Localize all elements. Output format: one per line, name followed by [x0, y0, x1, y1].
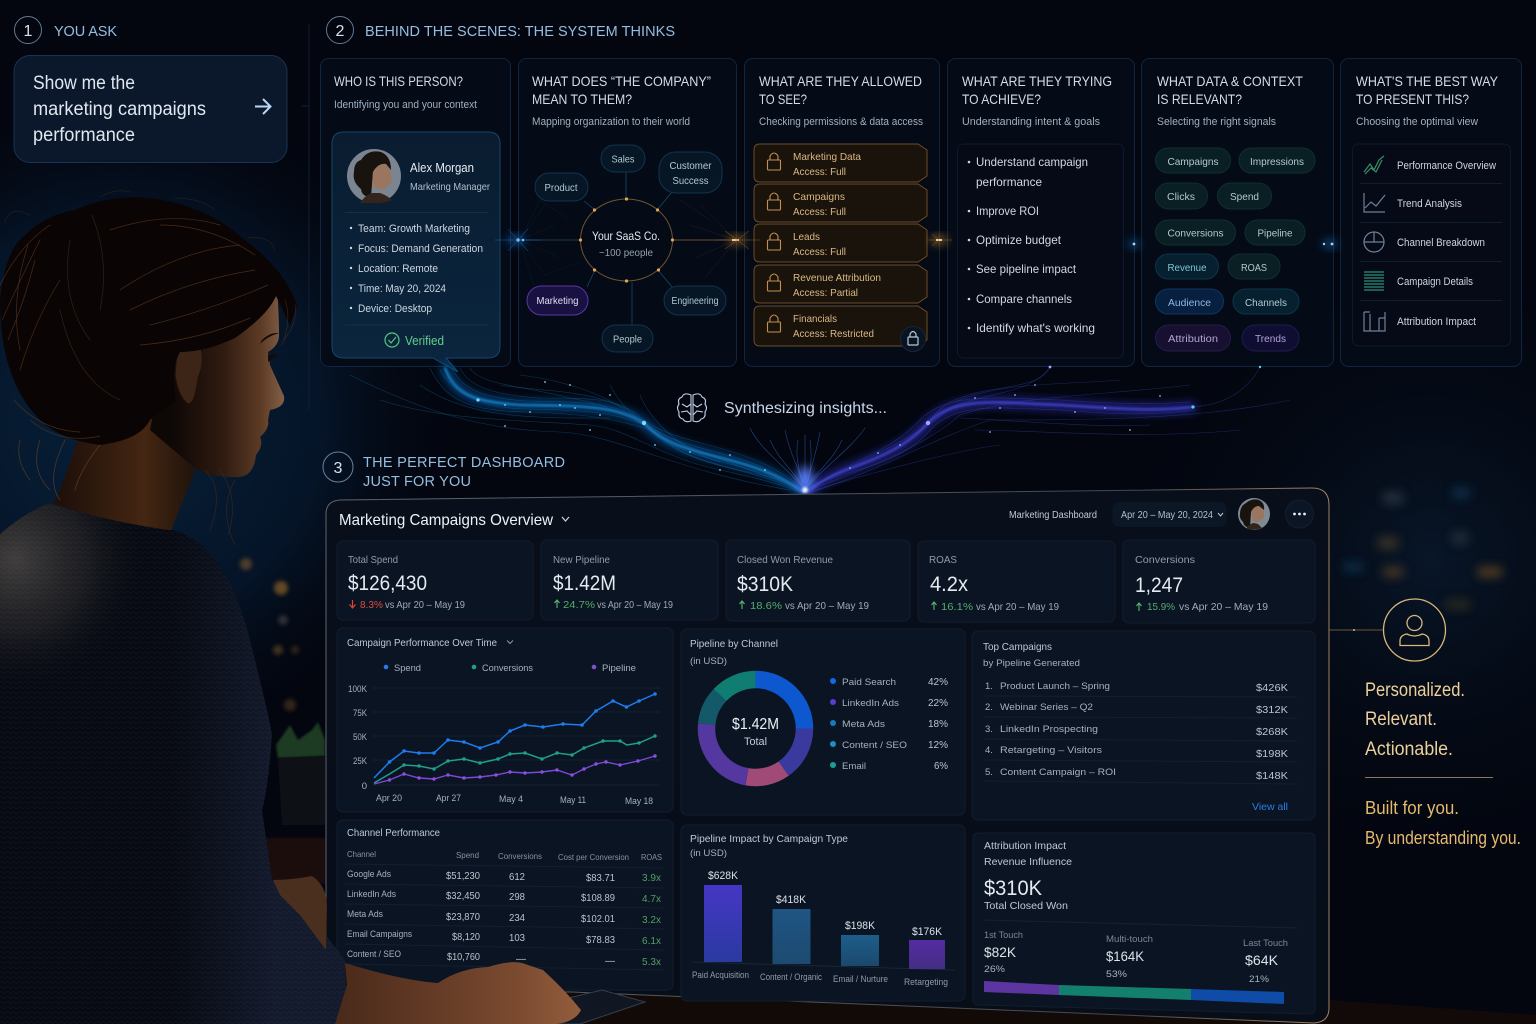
step 3 heading: THE PERFECT DASHBOARD	[363, 455, 565, 471]
KPI: conversions: 15.9%	[1147, 601, 1175, 613]
channel performance table: —	[516, 954, 526, 965]
donut panel: (in USD)	[690, 656, 727, 667]
channel performance table: Channel	[347, 849, 376, 859]
channel performance table: Meta Ads	[347, 909, 383, 920]
step 3 heading	[323, 452, 565, 490]
view options	[1352, 144, 1510, 346]
KPI: ROAS: 4.2x	[930, 573, 968, 596]
icon: arrow	[255, 99, 270, 114]
neck	[50, 400, 195, 535]
donut legend: LinkedIn Ads	[842, 698, 899, 709]
panel: best way to present: Choosing the optimal view	[1356, 116, 1478, 128]
step 1 heading: you ask: YOU ASK	[54, 24, 117, 40]
panel: what does the company mean	[518, 58, 737, 366]
avatar	[1238, 498, 1270, 530]
donut legend: 18%	[928, 719, 948, 730]
channel performance table: $78.83	[586, 935, 615, 946]
panel: what does the company mean: Mapping organization to their world	[532, 116, 690, 128]
channel performance table: 4.7x	[642, 893, 662, 905]
signal pills: Spend	[1230, 191, 1259, 203]
channel performance table: 298	[509, 892, 525, 903]
chart axes: 0	[362, 781, 367, 792]
channel performance table: $83.71	[586, 873, 615, 884]
top campaigns panel: 5.	[985, 767, 993, 778]
right hand	[335, 962, 581, 1024]
channel performance table: Channel Performance	[347, 827, 440, 839]
view options: Performance Overview	[1397, 160, 1496, 172]
attribution panel: $310K	[984, 877, 1042, 900]
channel performance table: $23,870	[446, 912, 480, 923]
channel performance table: —	[605, 956, 615, 967]
KPI: ROAS: vs Apr 20 – May 19	[976, 601, 1059, 613]
profile details: Team: Growth Marketing	[358, 223, 470, 235]
signal pills: Conversions	[1168, 228, 1224, 240]
donut legend: 42%	[928, 677, 948, 688]
right stream	[806, 366, 1290, 492]
org nodes: Marketing	[536, 295, 579, 307]
KPI: conversions: Conversions	[1135, 554, 1195, 566]
icon: restricted lock	[900, 326, 926, 352]
goals list: See pipeline impact	[976, 262, 1077, 276]
bar chart panel: $198K	[845, 920, 876, 932]
profile details: Location: Remote	[358, 263, 438, 275]
bar chart panel: $628K	[708, 870, 739, 882]
channel performance table: Email Campaigns	[347, 929, 412, 940]
goals list: Optimize budget	[976, 233, 1062, 247]
panel: what are they trying to achieve: WHAT ARE THEY TRYING	[962, 73, 1112, 89]
channel performance table: 103	[509, 933, 525, 944]
step 2 heading: 2	[336, 23, 345, 40]
attribution panel	[973, 833, 1315, 1014]
permission rows	[754, 144, 927, 352]
channel performance table: LinkedIn Ads	[347, 889, 396, 900]
chart legend	[384, 663, 636, 674]
signal pills: Pipeline	[1258, 228, 1293, 240]
signal pills: Trends	[1255, 333, 1286, 345]
dashboard header: Apr 20 – May 20, 2024	[1121, 510, 1213, 521]
goals list: Improve ROI	[976, 204, 1039, 218]
pipeline line	[374, 754, 657, 784]
KPI: total spend: 8.3%	[360, 599, 383, 611]
profile details: Time: May 20, 2024	[358, 283, 446, 295]
KPI: closed won revenue: vs Apr 20 – May 19	[785, 600, 869, 612]
channel performance table: Cost per Conversion	[558, 852, 629, 862]
KPI: ROAS: ROAS	[929, 554, 957, 566]
donut legend: Meta Ads	[842, 719, 885, 730]
KPI: total spend: Total Spend	[348, 554, 398, 566]
query card: marketing campaigns	[33, 99, 206, 120]
chart axes: Apr 20	[376, 793, 402, 804]
line chart panel	[337, 628, 673, 812]
bar chart panel: $176K	[912, 926, 943, 938]
attribution panel: 26%	[984, 964, 1006, 975]
KPI: new pipeline	[541, 540, 718, 620]
attribution panel: $64K	[1245, 952, 1279, 968]
donut panel: Total	[744, 736, 767, 748]
step 2 heading	[326, 16, 675, 44]
chart legend: Spend	[394, 663, 421, 674]
panel: who is this person: WHO IS THIS PERSON?	[334, 73, 463, 89]
goals list: Identify what's working	[976, 321, 1095, 335]
divider between steps	[301, 24, 309, 410]
donut legend: 12%	[928, 740, 948, 751]
KPI: new pipeline: vs Apr 20 – May 19	[597, 599, 673, 611]
top campaigns panel: Content Campaign – ROI	[1000, 767, 1116, 778]
top campaigns panel: $312K	[1256, 705, 1288, 716]
top campaigns panel: $198K	[1256, 749, 1288, 760]
permission rows: Leads	[793, 231, 820, 243]
donut legend: 6%	[934, 761, 948, 772]
permission rows: Access: Full	[793, 166, 846, 178]
channel performance table: ROAS	[641, 852, 662, 862]
donut panel: $1.42M	[732, 716, 779, 733]
attribution panel: 1st Touch	[984, 930, 1023, 941]
top campaigns panel	[972, 631, 1315, 820]
panel: who is this person	[320, 58, 510, 372]
panel: what data and context: WHAT DATA & CONTEXT	[1157, 73, 1303, 89]
channel performance table: $8,120	[452, 932, 480, 943]
signal pills: Channels	[1245, 297, 1287, 309]
profile details: Device: Desktop	[358, 303, 432, 315]
channel performance table: Conversions	[498, 851, 542, 861]
spend line	[374, 692, 657, 778]
channel performance table: $102.01	[581, 914, 615, 925]
avatar	[347, 149, 401, 203]
donut chart	[706, 680, 804, 778]
verified badge: Verified	[405, 334, 444, 348]
channel performance table: 612	[509, 872, 525, 883]
KPI: total spend: vs Apr 20 – May 19	[385, 599, 465, 611]
chart axes: May 4	[499, 794, 523, 805]
channel performance table: 3.9x	[642, 872, 662, 884]
KPI: total spend	[337, 541, 533, 620]
plant and desk haze	[262, 722, 326, 884]
channel performance table: 5.3x	[642, 956, 662, 968]
attribution panel: Total Closed Won	[984, 900, 1068, 912]
chart axes: 25K	[353, 756, 368, 767]
top campaigns panel: $268K	[1256, 727, 1288, 738]
donut panel: Pipeline by Channel	[690, 638, 778, 650]
top campaigns panel: LinkedIn Prospecting	[1000, 724, 1098, 735]
KPI: total spend: $126,430	[348, 572, 427, 595]
view options: Channel Breakdown	[1397, 237, 1485, 249]
top campaigns panel: Webinar Series – Q2	[1000, 702, 1093, 713]
bar chart panel: Email / Nurture	[833, 974, 888, 984]
panel: what are they allowed to see: Checking permissions & data access	[759, 116, 923, 128]
top campaigns panel: 4.	[985, 745, 993, 756]
panel: what data and context	[1142, 58, 1334, 366]
dashboard header: Marketing Campaigns Overview	[339, 512, 553, 529]
attribution panel: Last Touch	[1243, 938, 1288, 949]
step 1 heading: you ask	[14, 16, 117, 44]
more options button	[1286, 500, 1314, 528]
donut legend: 22%	[928, 698, 948, 709]
bar chart panel: (in USD)	[690, 848, 727, 859]
line chart panel: Campaign Performance Over Time	[347, 637, 497, 649]
org nodes: Engineering	[672, 295, 719, 307]
hair strands	[0, 191, 296, 545]
KPI: closed won revenue: Closed Won Revenue	[737, 554, 833, 566]
donut panel	[681, 629, 965, 815]
bars	[704, 885, 945, 969]
top campaigns panel: Top Campaigns	[983, 641, 1052, 653]
icon: brain	[678, 394, 706, 422]
personalised callout: Personalized.	[1365, 680, 1465, 701]
step 3 heading: JUST FOR YOU	[363, 474, 471, 490]
panel: what does the company mean: MEAN TO THEM?	[532, 91, 632, 107]
step 2 heading: BEHIND THE SCENES: THE SYSTEM THINKS	[365, 24, 675, 40]
org nodes: Product	[544, 182, 578, 194]
attribution panel: Multi-touch	[1106, 934, 1153, 945]
hair	[0, 197, 297, 445]
permission rows: Revenue Attribution	[793, 272, 881, 284]
signal pills: Impressions	[1250, 156, 1304, 168]
lock icons	[768, 153, 780, 332]
goals list: Compare channels	[976, 292, 1072, 306]
panel: best way to present: TO PRESENT THIS?	[1356, 91, 1469, 107]
channel performance table: $10,760	[447, 952, 480, 963]
signal pills: Revenue	[1168, 262, 1207, 274]
step 1 heading: you ask: 1	[24, 23, 33, 40]
donut legend	[830, 677, 948, 772]
KPI: closed won revenue: 18.6%	[750, 600, 782, 612]
org nodes: Customer	[670, 160, 712, 172]
face	[150, 288, 284, 477]
donut legend: Email	[842, 761, 866, 772]
view options: Attribution Impact	[1397, 316, 1476, 328]
view icons	[1364, 156, 1385, 331]
panel: what data and context: IS RELEVANT?	[1157, 91, 1242, 107]
profile details	[350, 223, 483, 315]
keyboard	[540, 990, 645, 1024]
data streams converging on dashboard	[350, 366, 1290, 493]
org nodes: People	[613, 334, 642, 346]
org nodes: Success	[672, 175, 708, 187]
personalised callout	[1329, 599, 1521, 848]
attribution panel: $164K	[1106, 948, 1145, 964]
channel performance table: $108.89	[581, 893, 615, 904]
top campaigns panel: Retargeting – Visitors	[1000, 745, 1102, 756]
desk	[280, 992, 1320, 1024]
view options: Campaign Details	[1397, 276, 1473, 288]
bar chart panel	[681, 825, 965, 1001]
permission rows: Access: Full	[793, 206, 846, 218]
left stream	[350, 368, 806, 492]
bar chart panel: Pipeline Impact by Campaign Type	[690, 833, 848, 845]
goals list: Understand campaign	[976, 155, 1088, 169]
personalised callout: Actionable.	[1365, 739, 1453, 760]
permission rows: Access: Full	[793, 246, 846, 258]
top campaigns panel: 1.	[985, 681, 993, 692]
signal pills: ROAS	[1241, 262, 1267, 274]
bar chart panel: Paid Acquisition	[692, 970, 749, 980]
dashboard header: Marketing Dashboard	[1009, 510, 1097, 521]
chart legend: Conversions	[482, 663, 533, 674]
org map: ~100 people	[599, 247, 653, 259]
dashboard header	[339, 498, 1314, 530]
ear	[175, 339, 202, 404]
synthesizing insights label	[678, 394, 887, 422]
panel: what are they allowed to see: WHAT ARE THEY ALLOWED	[759, 73, 922, 89]
signal pills: Audience	[1168, 297, 1211, 309]
permission rows: Campaigns	[793, 191, 845, 203]
KPI: new pipeline: 24.7%	[563, 599, 595, 611]
KPI: closed won revenue	[726, 540, 910, 621]
signal pills: Campaigns	[1168, 156, 1218, 168]
top campaigns panel: $148K	[1256, 771, 1288, 782]
chart axes: 100K	[348, 684, 368, 695]
sweater	[0, 503, 347, 1024]
signal pills	[1156, 148, 1315, 351]
signal pills: Attribution	[1168, 333, 1218, 345]
permission rows: Marketing Data	[793, 151, 861, 163]
KPI: conversions	[1123, 540, 1315, 623]
channel performance table: 3.2x	[642, 914, 662, 926]
channel performance table: $51,230	[446, 871, 480, 882]
channel performance table: 6.1x	[642, 935, 662, 947]
goals list	[958, 144, 1124, 358]
channel performance table: Google Ads	[347, 869, 391, 880]
profile card: Alex Morgan	[410, 161, 474, 175]
panel: what are they trying to achieve	[948, 58, 1134, 366]
attribution panel: 53%	[1106, 969, 1128, 980]
channel performance table: Spend	[456, 850, 479, 860]
org nodes: Sales	[612, 154, 634, 166]
KPI: ROAS: 16.1%	[941, 601, 973, 613]
bar chart panel: Retargeting	[904, 977, 948, 987]
KPI: conversions: vs Apr 20 – May 19	[1179, 601, 1268, 613]
attribution panel: 21%	[1249, 974, 1270, 985]
query card	[14, 56, 287, 162]
top campaigns panel: $426K	[1256, 683, 1288, 694]
panel: what are they allowed to see	[744, 58, 940, 366]
panel: who is this person: Identifying you and your context	[334, 99, 477, 111]
KPI: ROAS	[918, 541, 1115, 622]
chart axes: 75K	[353, 708, 368, 719]
profile card	[332, 132, 500, 372]
centre fan	[750, 428, 865, 490]
bar chart panel: Content / Organic	[760, 972, 822, 982]
personalised callout: Relevant.	[1365, 709, 1437, 730]
signal pills: Clicks	[1167, 191, 1195, 203]
synthesizing insights label: Synthesizing insights...	[724, 400, 887, 417]
KPI: closed won revenue: $310K	[737, 573, 793, 596]
panel: what are they allowed to see: TO SEE?	[759, 91, 807, 107]
chart axes: 50K	[353, 732, 368, 743]
chart axes: May 18	[625, 796, 653, 807]
top campaigns panel: 3.	[985, 724, 993, 735]
profile card: Marketing Manager	[410, 181, 490, 193]
permission rows: Access: Partial	[793, 287, 858, 299]
personalised callout: Built for you.	[1365, 798, 1459, 818]
connector glows between panels	[495, 229, 1338, 251]
woman at desk	[0, 191, 645, 1024]
panel: best way to present: WHAT'S THE BEST WAY	[1356, 73, 1499, 89]
dashboard	[326, 488, 1329, 1023]
attribution bar	[984, 981, 1284, 1004]
top campaigns panel: by Pipeline Generated	[983, 658, 1080, 669]
step 3 heading: 3	[334, 460, 343, 477]
org map	[518, 145, 737, 352]
chart legend: Pipeline	[602, 663, 636, 674]
attribution panel: Attribution Impact	[984, 840, 1066, 852]
channel performance table: 234	[509, 913, 525, 924]
attribution panel: Revenue Influence	[984, 856, 1072, 868]
view all link: View all	[1252, 801, 1288, 813]
bar chart panel: $418K	[776, 894, 807, 906]
icon: person in circle	[1384, 599, 1446, 661]
permission rows: Financials	[793, 313, 837, 325]
channel performance table: $32,450	[446, 891, 480, 902]
panel: what does the company mean: WHAT DOES “THE COMPANY”	[532, 73, 711, 89]
chart axes: Apr 27	[436, 793, 461, 804]
channel performance table: Content / SEO	[347, 949, 401, 960]
panel: what are they trying to achieve: Understanding intent & goals	[962, 116, 1100, 128]
donut legend: Content / SEO	[842, 740, 907, 751]
conversions line	[374, 734, 657, 783]
left hand	[273, 876, 327, 950]
verified badge	[385, 333, 444, 348]
top campaigns panel: 2.	[985, 702, 993, 713]
KPI: conversions: 1,247	[1135, 574, 1183, 597]
org nodes	[527, 145, 726, 352]
goals list: performance	[976, 175, 1042, 189]
KPI: new pipeline: New Pipeline	[553, 554, 610, 566]
panel: what are they trying to achieve: TO ACHIEVE?	[962, 91, 1041, 107]
view options: Trend Analysis	[1397, 198, 1462, 210]
channel performance table	[337, 820, 673, 990]
panel: best way to present	[1340, 58, 1522, 366]
permission rows: Access: Restricted	[793, 328, 874, 340]
query card: Show me the	[33, 73, 135, 94]
chart axes	[348, 684, 660, 807]
KPI: new pipeline: $1.42M	[553, 572, 616, 595]
attribution panel: $82K	[984, 944, 1017, 960]
org map: Your SaaS Co.	[592, 229, 660, 243]
top campaigns panel: Product Launch – Spring	[1000, 681, 1110, 692]
profile details: Focus: Demand Generation	[358, 243, 483, 255]
donut legend: Paid Search	[842, 677, 896, 688]
chart axes: May 11	[560, 795, 586, 806]
query card: performance	[33, 125, 135, 146]
panel: what data and context: Selecting the right signals	[1157, 116, 1276, 128]
